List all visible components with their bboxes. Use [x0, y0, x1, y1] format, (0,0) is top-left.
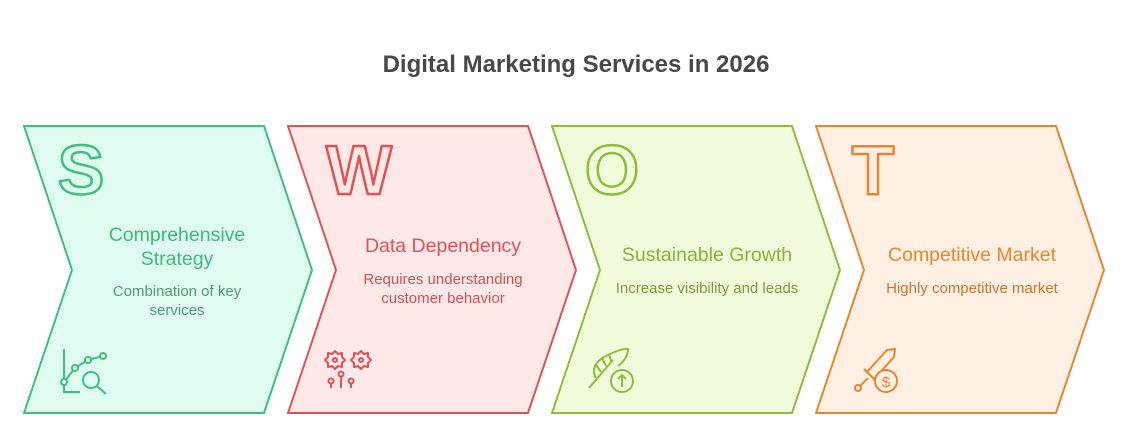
heading: Comprehensive Strategy: Comprehensive	[109, 224, 245, 246]
title: Digital Marketing Services in 2026	[383, 51, 769, 78]
panel: weaknesses	[288, 126, 576, 413]
letter O: O	[585, 131, 639, 209]
icon: sword coin	[855, 349, 897, 392]
letter T: T	[852, 131, 894, 209]
icon: sword coin: $	[882, 374, 891, 391]
panel: threats	[816, 126, 1104, 413]
panel: opportunities	[552, 126, 840, 413]
letter W: W	[326, 131, 392, 209]
text: requires: customer behavior	[381, 290, 505, 307]
icon: leaf growth	[589, 349, 633, 392]
text: increase: Increase visibility and leads	[616, 280, 798, 297]
heading: Data Dependency: Data Dependency	[365, 235, 521, 257]
text: combination: Combination of key	[113, 283, 241, 300]
text: combination: services	[149, 302, 205, 319]
letter S: S	[58, 131, 104, 209]
heading: Comprehensive Strategy: Strategy	[141, 248, 214, 270]
text: highly: Highly competitive market	[886, 280, 1059, 297]
icon: chart search	[61, 349, 106, 394]
heading: Sustainable Growth: Sustainable Growth	[622, 244, 792, 266]
icon: gears	[325, 351, 371, 388]
panel: strengths	[24, 126, 312, 413]
text: requires: Requires understanding	[363, 271, 523, 288]
heading: Competitive Market: Competitive Market	[888, 244, 1057, 266]
